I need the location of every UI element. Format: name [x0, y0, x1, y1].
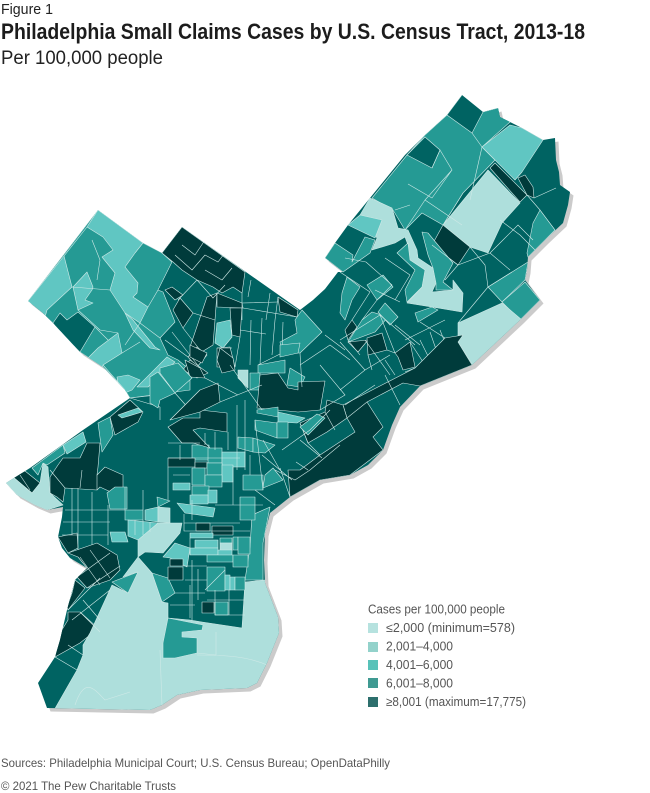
sources note: Sources: Philadelphia Municipal Court; U.S. Census Bureau; OpenDataPhilly [1, 756, 390, 770]
tracts: northwest panhandle [28, 210, 190, 398]
tracts: Port Richmond river strip [288, 335, 472, 497]
map shadow [10, 98, 574, 714]
legend item: 2,000 or less: ≤2,000 (minimum=578) [386, 621, 515, 635]
copyright: © 2021 The Pew Charitable Trusts [1, 779, 176, 793]
tracts: northeast Philadelphia [325, 95, 556, 370]
legend item: 4,001 to 6,000: 4,001–6,000 [386, 658, 453, 672]
subtitle: Per 100,000 people [1, 48, 163, 69]
tracts: South Philadelphia grid [163, 514, 250, 620]
legend title: Cases per 100,000 people [368, 602, 505, 616]
legend item: 8,001 or more: ≥8,001 (maximum=17,775) [386, 695, 526, 709]
tracts: West and Southwest Philadelphia [53, 487, 284, 714]
figure label: Figure 1 [1, 2, 53, 18]
legend item: 6,001 to 8,000: 6,001–8,000 [386, 676, 453, 690]
legend [368, 602, 526, 709]
legend item: 2,001 to 4,000: 2,001–4,000 [386, 640, 453, 654]
tracts: Germantown and north [162, 227, 325, 412]
choropleth map of census tracts [0, 90, 600, 720]
tracts: Fairmount and west park [6, 380, 200, 510]
map base tracts [0, 90, 600, 720]
title: Philadelphia Small Claims Cases by U.S. Census Tract, 2013-18 [1, 19, 585, 44]
tracts: North and Center Philadelphia [150, 335, 415, 520]
